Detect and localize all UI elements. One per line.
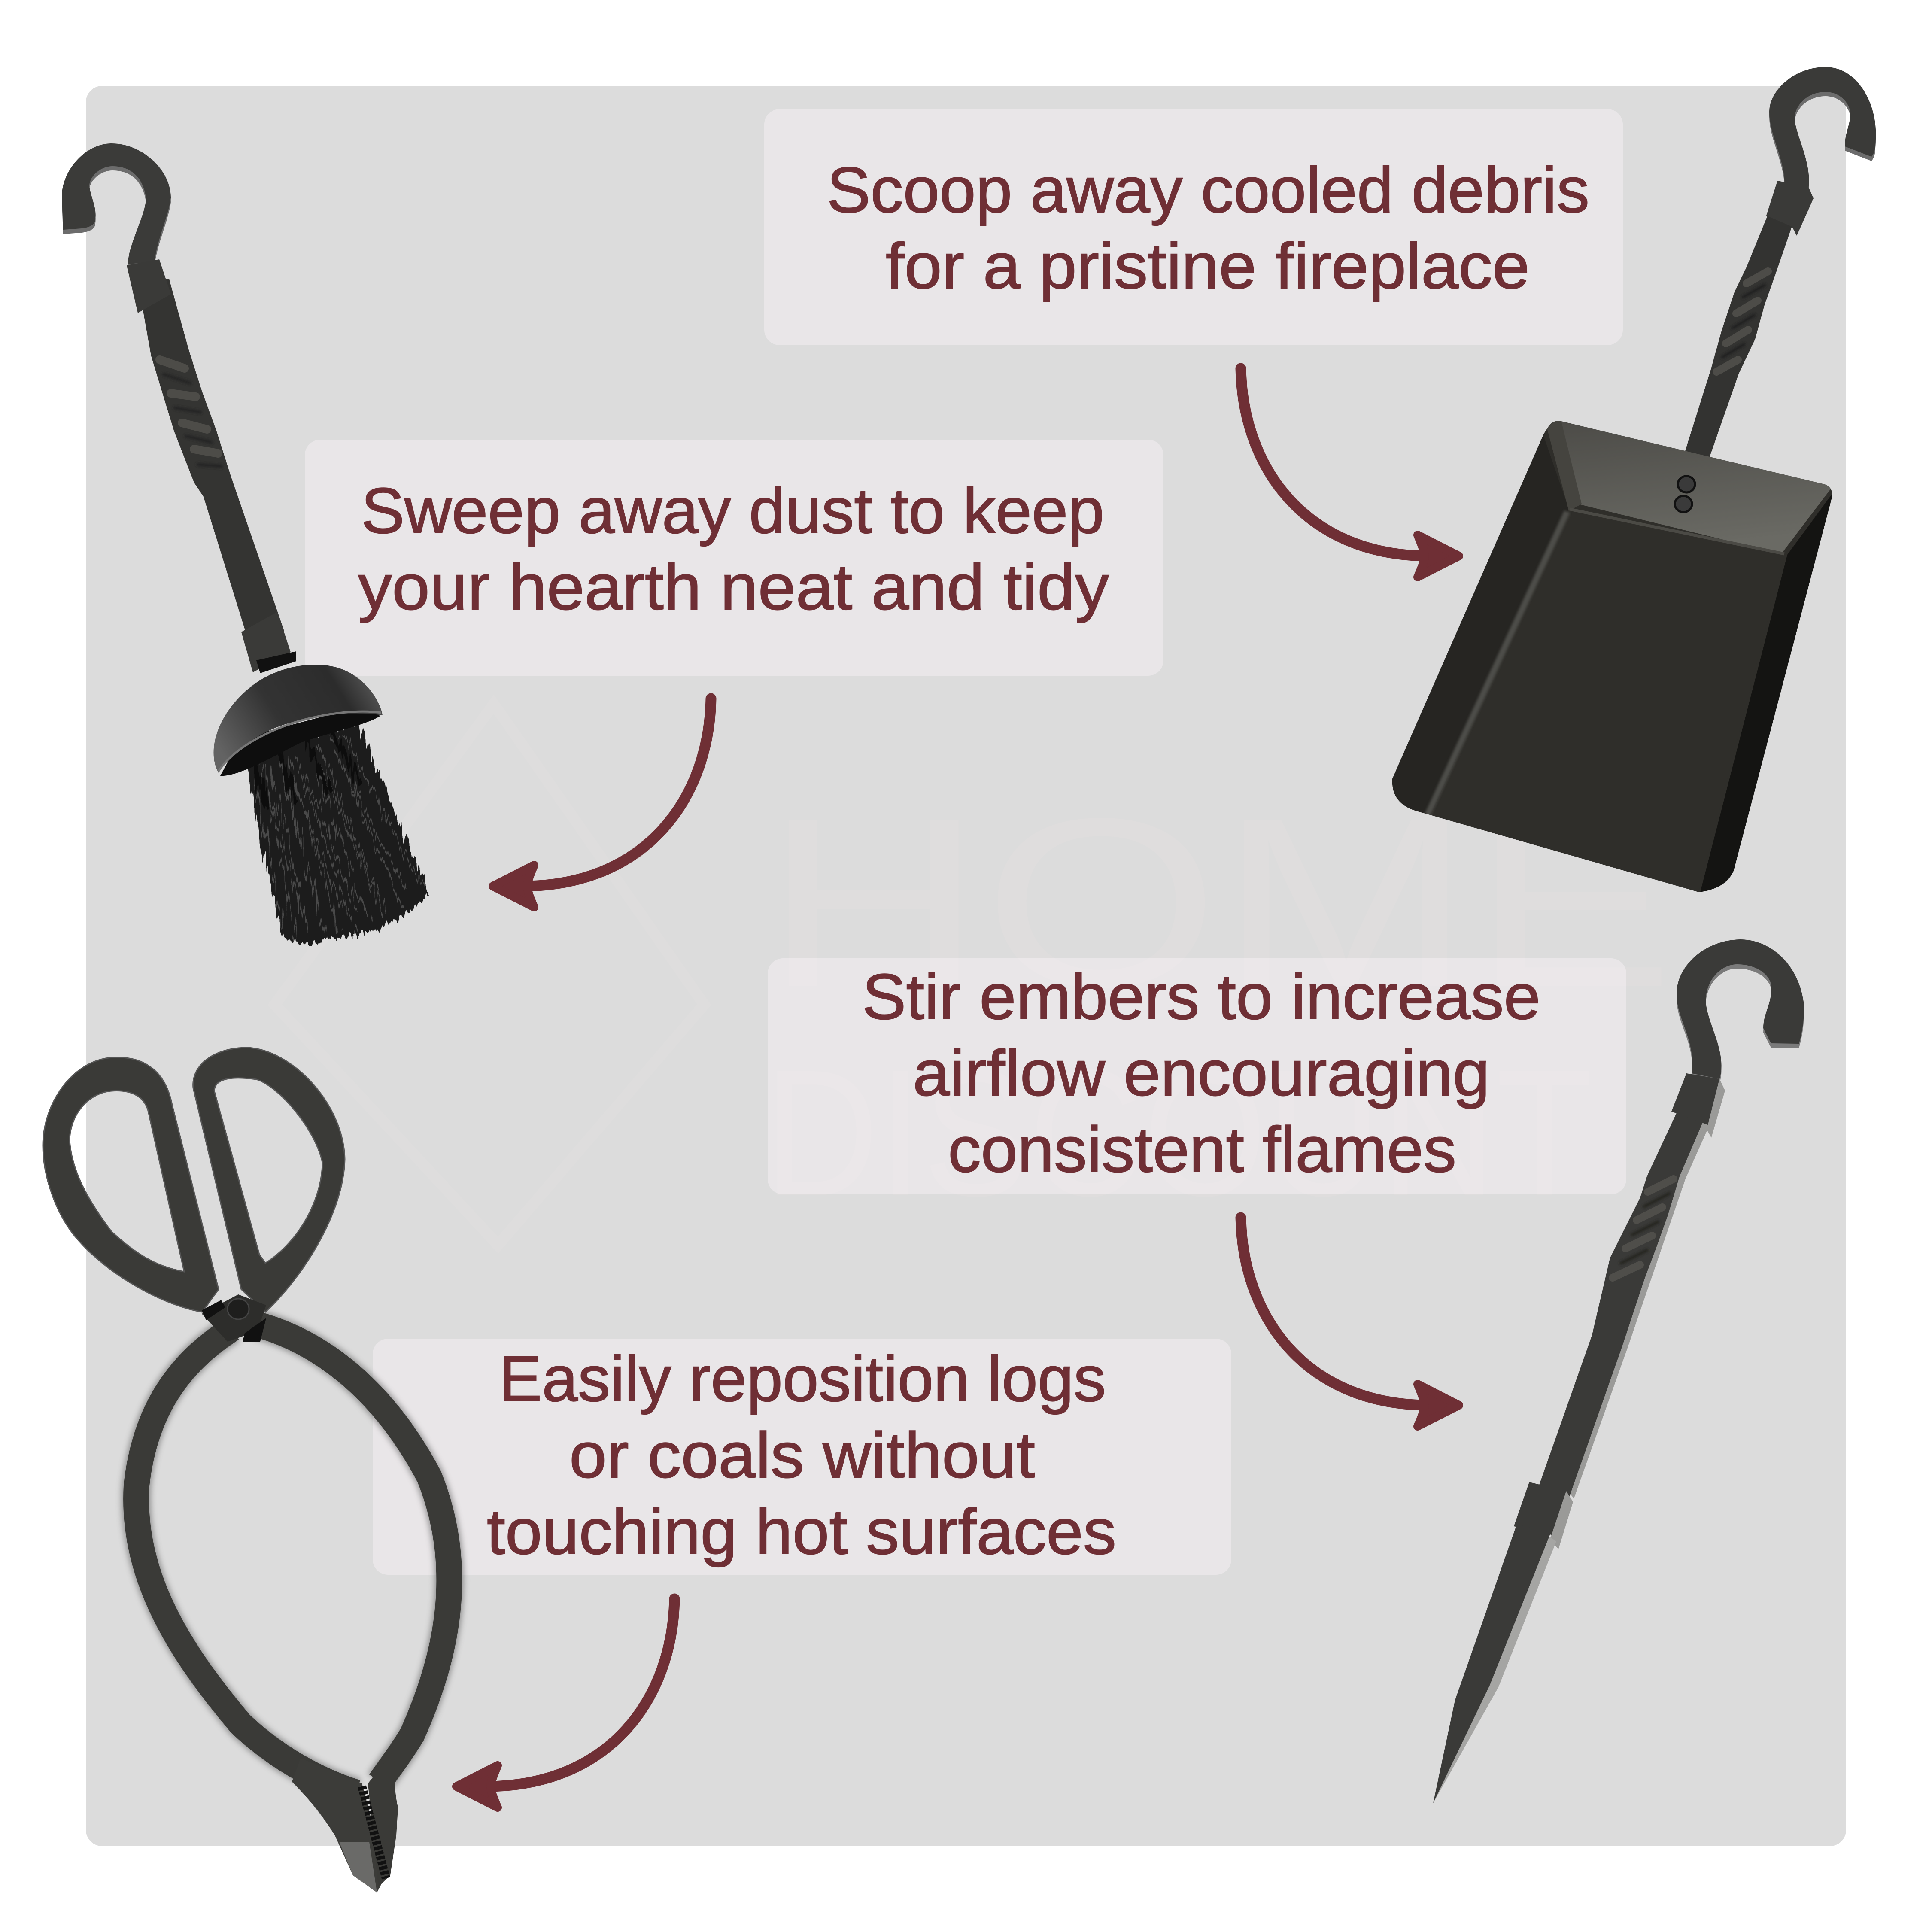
poker spike	[1433, 1524, 1556, 1803]
callout: shovel	[764, 109, 1623, 345]
arrow: to shovel	[1241, 368, 1459, 577]
callout: brush: your hearth neat and tidy	[358, 551, 1109, 623]
callout: poker: Stir embers to increase	[862, 960, 1540, 1033]
arrow: to tongs	[456, 1599, 674, 1807]
callout: brush: Sweep away dust to keep	[361, 474, 1104, 547]
icon: fire tongs	[43, 1048, 449, 1893]
callout: brush	[305, 440, 1163, 676]
callout: tongs: Easily reposition logs	[499, 1343, 1106, 1415]
brush handle	[127, 259, 296, 673]
tongs shadow	[136, 1324, 449, 1792]
poker collars	[1514, 1073, 1725, 1549]
brush dome	[213, 665, 383, 776]
shovel handle	[1684, 181, 1814, 459]
tongs left handle	[43, 1057, 219, 1312]
poker shaft	[1537, 1099, 1711, 1498]
watermark: HOME	[764, 768, 1674, 1037]
callout: tongs: or coals without	[569, 1419, 1035, 1491]
tongs tips	[292, 1749, 398, 1893]
icon: hearth brush	[62, 143, 429, 945]
brush bristles	[245, 724, 429, 945]
callout: shovel: Scoop away cooled debris	[827, 154, 1589, 226]
shovel pan	[1387, 419, 1835, 897]
tongs pivot	[202, 1294, 266, 1342]
icon: poker	[1433, 939, 1804, 1803]
callout: shovel: for a pristine fireplace	[886, 230, 1530, 302]
poker hook	[1677, 939, 1804, 1083]
callout: poker: consistent flames	[948, 1113, 1456, 1185]
callout: poker	[768, 958, 1626, 1194]
shovel hook	[1769, 67, 1876, 197]
arrow: to brush	[493, 699, 711, 907]
watermark: DISCOUNT	[764, 1033, 1593, 1234]
shovel screws	[1675, 476, 1695, 512]
callout: tongs	[373, 1339, 1231, 1575]
callout: tongs: touching hot surfaces	[487, 1495, 1116, 1567]
callout: poker: airflow encouraging	[913, 1037, 1490, 1109]
tongs right handle	[193, 1048, 345, 1312]
arrow: to poker	[1241, 1218, 1459, 1426]
watermark	[275, 704, 1674, 1245]
icon: ash shovel	[1387, 67, 1876, 897]
brush hook	[62, 143, 171, 268]
tongs lower arms	[136, 1324, 449, 1792]
